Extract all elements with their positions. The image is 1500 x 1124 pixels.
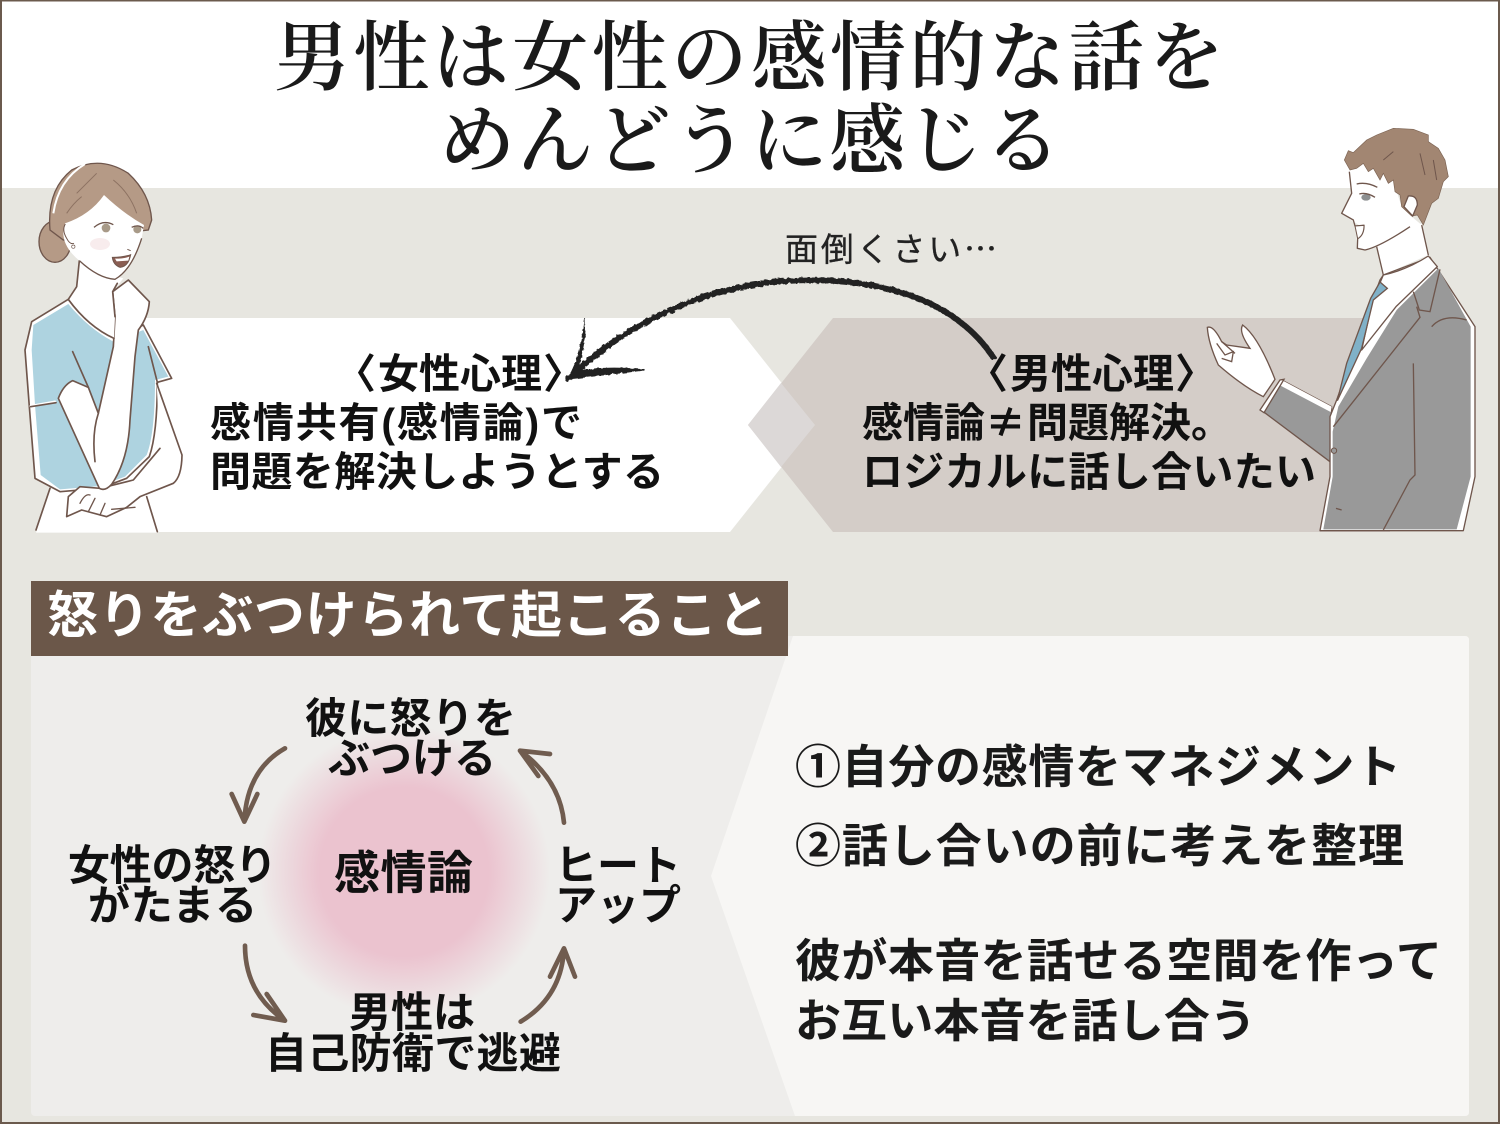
center circle [258, 726, 550, 1018]
lower arm and hand [67, 383, 182, 517]
step: anger at him: ぶつける [328, 735, 496, 782]
panel: female psychology: 感情共有(感情論)で [210, 400, 582, 446]
sleeve [1263, 380, 1332, 462]
sleeve hem [31, 402, 55, 406]
cycle arrows [232, 748, 575, 1022]
neck [68, 261, 123, 338]
ear [1404, 196, 1417, 216]
title [274, 17, 1224, 184]
panel: male psychology: 〉 [1175, 351, 1216, 397]
text block: solutions: 彼が本音を話せる空間を作って [795, 935, 1442, 987]
step: woman's anger builds: 女性の怒り [68, 842, 277, 889]
skirt [36, 488, 157, 533]
panel: female psychology: 〉 [543, 351, 584, 397]
panel: female psychology: 女性心理 [378, 351, 542, 397]
illustration: man [1207, 128, 1475, 531]
hair [50, 163, 152, 240]
center label: 感情論 [334, 847, 473, 899]
bun [39, 221, 71, 262]
panel: male psychology [748, 318, 1390, 532]
hair [1344, 128, 1448, 225]
jacket [1320, 257, 1475, 531]
eye [1361, 194, 1371, 201]
panel: male psychology: 感情論 [862, 400, 985, 446]
panel: male psychology: ロジカルに話し合いたい [862, 449, 1316, 495]
cycle diagram [68, 695, 681, 1077]
step: heat up [555, 842, 681, 929]
illustration: woman [25, 163, 182, 533]
title: 男性は女性の感情的な話を [274, 17, 1224, 101]
step: anger at him [305, 695, 516, 782]
panel: female psychology: 問題を解決しようとする [210, 449, 664, 495]
step: heat up: ヒート [555, 842, 681, 889]
panel: lower background [31, 636, 1469, 1116]
panel: female psychology [112, 318, 815, 532]
panel: male psychology: ≠ [985, 389, 1026, 449]
shirt and tie [1362, 256, 1437, 350]
face [1342, 165, 1422, 250]
text block: solutions: ①自分の感情をマネジメント [795, 741, 1401, 793]
panel: female psychology: 〈 [335, 351, 376, 397]
step: man retreats: 自己防衛で逃避 [265, 1030, 561, 1077]
step: woman's anger builds: がたまる [88, 882, 257, 929]
neck [1377, 223, 1428, 275]
handwritten remark: 面倒くさい… [785, 223, 997, 271]
text block: solutions: お互い本音を話し合う [795, 995, 1256, 1047]
text block: solutions [795, 741, 1442, 1047]
step: anger at him: 彼に怒りを [305, 695, 516, 742]
face [63, 195, 144, 279]
hand [1207, 325, 1275, 397]
jacket lines [1333, 269, 1467, 530]
panel: male psychology: 〈 [967, 351, 1008, 397]
step: man retreats: 男性は [349, 989, 475, 1036]
step: woman's anger builds [68, 842, 277, 929]
step: man retreats [265, 989, 561, 1077]
raised arm [58, 280, 149, 489]
step: heat up: アップ [555, 882, 681, 929]
arrow: from male to female [568, 280, 993, 379]
panel: male psychology: 男性心理 [1010, 351, 1174, 397]
title: めんどうに感じる [439, 100, 1061, 184]
panel: male psychology: 問題解決。 [1027, 400, 1232, 446]
blouse outline [25, 299, 172, 492]
heading bar: 怒りをぶつけられて起こること [47, 587, 769, 644]
text block: solutions: ②話し合いの前に考えを整理 [795, 820, 1404, 872]
